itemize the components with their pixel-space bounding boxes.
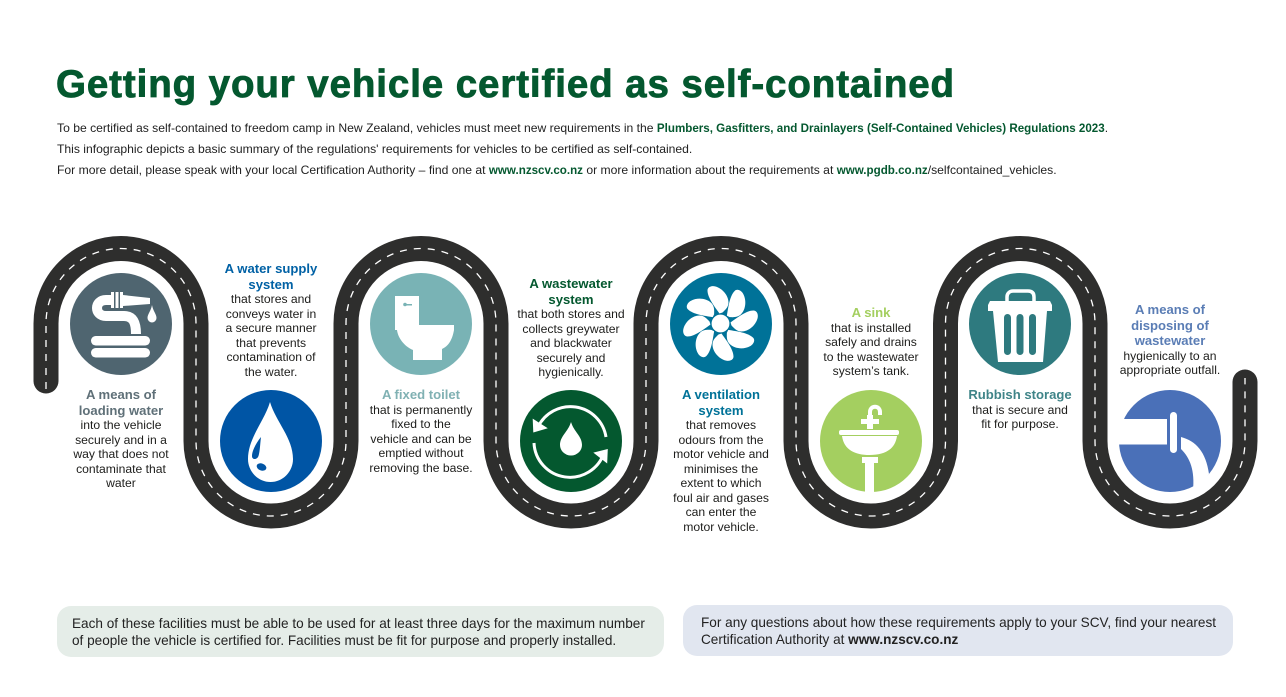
step: ventilation: system bbox=[698, 402, 744, 418]
icon: wastewater cycle bbox=[520, 390, 622, 492]
step: water supply: a secure manner bbox=[225, 321, 317, 335]
step: fixed toilet: A fixed toilet bbox=[382, 387, 460, 402]
step: water supply: conveys water in bbox=[226, 306, 316, 320]
icon: water drop bbox=[220, 390, 322, 492]
step: ventilation: extent to which bbox=[680, 476, 761, 490]
icon: rubbish bin bbox=[969, 273, 1071, 375]
step: sink: system’s tank. bbox=[833, 364, 909, 378]
step: disposing wastewater bbox=[1120, 302, 1220, 377]
step: loading water: water bbox=[106, 476, 136, 490]
step: wastewater: system bbox=[548, 292, 594, 306]
step: fixed toilet: vehicle and can be bbox=[370, 432, 472, 446]
step: disposing wastewater: wastewater bbox=[1135, 333, 1205, 348]
step: rubbish storage bbox=[968, 387, 1072, 431]
step: water supply: system bbox=[248, 276, 294, 292]
step: wastewater: securely and bbox=[537, 350, 605, 364]
step: fixed toilet: removing the base. bbox=[369, 460, 473, 474]
step: loading water: securely and in a bbox=[75, 432, 167, 446]
step: sink bbox=[823, 305, 919, 378]
step: loading water: way that does not bbox=[73, 447, 169, 461]
step: water supply: contamination of bbox=[226, 350, 316, 364]
step: sink: A sink bbox=[852, 305, 890, 320]
step: wastewater: A wastewater bbox=[529, 276, 613, 291]
icon: outfall pipe bbox=[1115, 390, 1221, 492]
step: ventilation: odours from the bbox=[678, 432, 764, 446]
note: questions: For any questions about how these requirements apply to your SCV, find your nearest bbox=[701, 615, 1216, 630]
step: water supply: that stores and bbox=[231, 292, 311, 306]
step: rubbish storage: that is secure and bbox=[972, 402, 1068, 416]
step: ventilation bbox=[673, 387, 769, 534]
step: wastewater: that both stores and bbox=[517, 307, 625, 321]
intro line 3: For more detail, please speak with your local Certification Authority – find one at www.nzscv.co.nz or more information about the requirements at www.pgdb.co.nz/selfcontained_vehicles. bbox=[57, 163, 1057, 177]
step: fixed toilet: that is permanently bbox=[370, 402, 472, 416]
icon: toilet bbox=[370, 273, 472, 375]
step: wastewater: hygienically. bbox=[538, 365, 604, 379]
title: Getting your vehicle certified as self-contained bbox=[56, 63, 955, 106]
intro line 1: To be certified as self-contained to freedom camp in New Zealand, vehicles must meet new requirements in the Plumbers, Gasfitters, and Drainlayers (Self-Contained Vehicles) Regulations 2023. bbox=[57, 121, 1108, 135]
icon: ventilation fan bbox=[670, 273, 772, 375]
step: ventilation: minimises the bbox=[684, 462, 758, 476]
step: wastewater: and blackwater bbox=[530, 336, 612, 350]
step: loading water: into the vehicle bbox=[80, 418, 162, 432]
step: loading water: loading water bbox=[79, 402, 163, 418]
step: water supply: that prevents bbox=[236, 336, 306, 350]
step: fixed toilet: fixed to the bbox=[391, 417, 451, 431]
step: disposing wastewater: A means of bbox=[1135, 302, 1205, 317]
note: three days bbox=[57, 606, 664, 657]
step: loading water bbox=[73, 387, 169, 490]
road surface bbox=[46, 249, 1245, 516]
step: ventilation: motor vehicle. bbox=[683, 520, 759, 534]
road centre line bbox=[46, 249, 1245, 516]
note: three days: Each of these facilities must be able to be used for at least three days for the maximum number bbox=[72, 616, 645, 631]
step: wastewater bbox=[517, 276, 625, 379]
intro text bbox=[57, 121, 1108, 177]
step: ventilation: A ventilation bbox=[682, 387, 760, 402]
step: disposing wastewater: appropriate outfall. bbox=[1120, 363, 1220, 377]
step: loading water: A means of bbox=[86, 387, 156, 402]
step: fixed toilet: emptied without bbox=[378, 446, 464, 460]
step: sink: that is installed bbox=[831, 320, 911, 334]
step: disposing wastewater: disposing of bbox=[1131, 318, 1209, 332]
step: water supply: the water. bbox=[245, 364, 297, 378]
step: ventilation: can enter the bbox=[686, 505, 756, 519]
step: sink: safely and drains bbox=[825, 335, 917, 349]
step: ventilation: foul air and gases bbox=[673, 490, 769, 504]
step: ventilation: that removes bbox=[686, 418, 756, 432]
note: questions bbox=[683, 605, 1233, 656]
step: disposing wastewater: hygienically to an bbox=[1123, 348, 1217, 362]
step: water supply bbox=[225, 261, 318, 378]
step: sink: to the wastewater bbox=[823, 350, 919, 364]
step: loading water: contaminate that bbox=[76, 462, 166, 476]
icon: hose bbox=[70, 273, 172, 375]
step: rubbish storage: fit for purpose. bbox=[981, 417, 1059, 431]
note: questions: Certification Authority at www.nzscv.co.nz bbox=[701, 632, 958, 646]
note: three days: of people the vehicle is certified for. Facilities must be fit for purpose and properly installed. bbox=[72, 632, 616, 648]
step: ventilation: motor vehicle and bbox=[673, 447, 769, 461]
icon: sink bbox=[820, 390, 922, 492]
step: water supply: A water supply bbox=[225, 261, 317, 276]
step: fixed toilet bbox=[369, 387, 473, 474]
step: wastewater: collects greywater bbox=[522, 322, 620, 336]
intro line 2: This infographic depicts a basic summary of the regulations' requirements for vehicles to be certified as self-contained. bbox=[57, 142, 692, 156]
step: rubbish storage: Rubbish storage bbox=[968, 387, 1072, 402]
